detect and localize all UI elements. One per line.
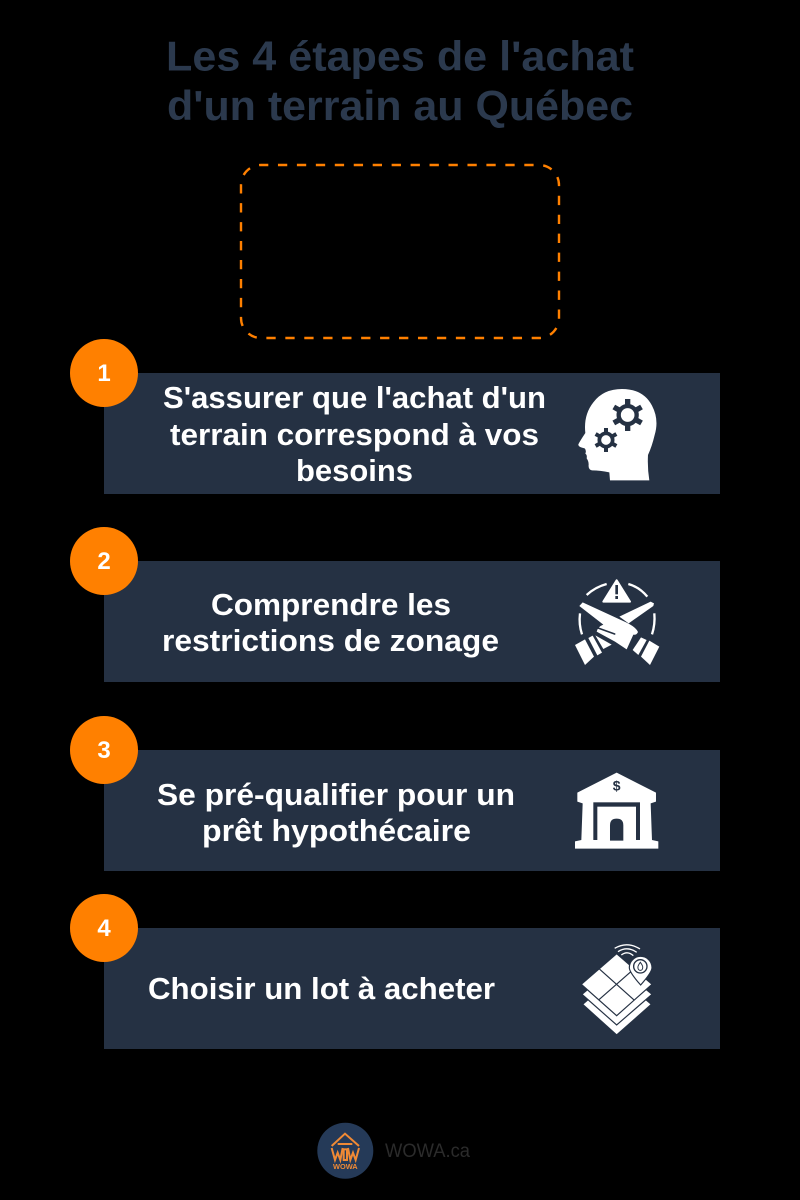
step 3 number badge: 3 <box>97 737 111 764</box>
step 2 number badge <box>70 527 138 595</box>
step 1 number badge <box>70 339 138 407</box>
step 2 text <box>162 588 499 658</box>
step 1 text: S'assurer que l'achat d'un <box>163 381 546 415</box>
step 4 number badge: 4 <box>97 915 111 942</box>
title <box>166 32 634 129</box>
panel: step 4 <box>70 894 720 1049</box>
icon: crossed hands with warning <box>575 580 659 665</box>
title: d'un terrain au Québec <box>167 82 633 129</box>
icon: land parcel layers with pin <box>581 945 652 1035</box>
panel: step 3 <box>70 716 720 871</box>
panel: step 1 <box>70 339 720 494</box>
step 2 number badge: 2 <box>97 548 111 575</box>
panel: step 2 <box>70 527 720 682</box>
logo wordmark: WOWA.ca <box>385 1141 470 1162</box>
logo: WOWA <box>317 1123 373 1179</box>
step 2 text: restrictions de zonage <box>162 624 499 658</box>
icon: head with gears <box>578 389 656 480</box>
logo: WOWA: WOWA <box>333 1162 358 1171</box>
step 1 text <box>163 381 546 488</box>
step 4 number badge <box>70 894 138 962</box>
step 3 text: prêt hypothécaire <box>202 814 471 848</box>
step 1 text: terrain correspond à vos <box>170 418 539 452</box>
dashed image placeholder <box>241 165 559 338</box>
step 2 text: Comprendre les <box>211 588 451 622</box>
step 4 text: Choisir un lot à acheter <box>148 972 495 1006</box>
icon: bank building <box>575 773 658 849</box>
title: Les 4 étapes de l'achat <box>166 32 634 80</box>
step 1 text: besoins <box>296 454 413 488</box>
step 3 text: Se pré-qualifier pour un <box>157 778 515 812</box>
step 3 text <box>157 778 515 848</box>
icon: bank building: $ <box>613 778 621 794</box>
step 1 number badge: 1 <box>97 360 111 387</box>
step 3 number badge <box>70 716 138 784</box>
